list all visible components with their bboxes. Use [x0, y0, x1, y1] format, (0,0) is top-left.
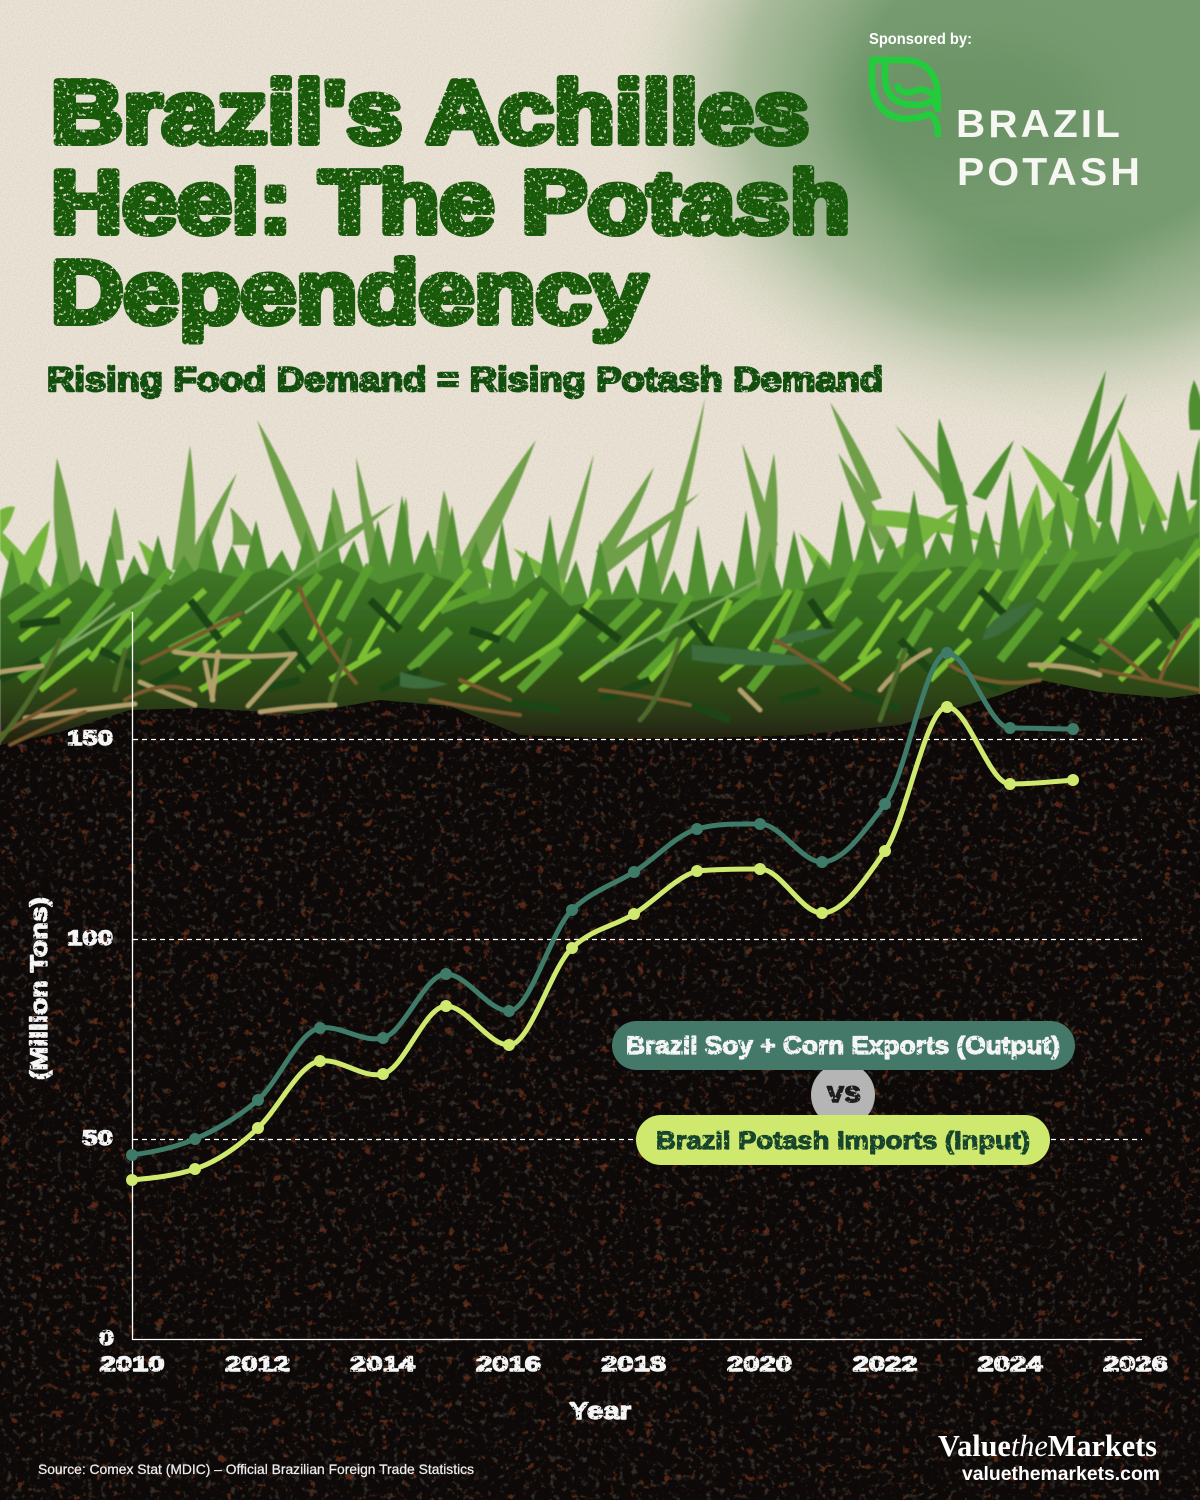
- title: [51, 62, 850, 342]
- y axis tick labels: 150: [67, 727, 113, 750]
- logo wordmark: POTASH: [957, 151, 1143, 194]
- ValueTheMarkets logo: valuethemarkets.com: [962, 1464, 1160, 1485]
- sponsor logo: [870, 59, 1143, 194]
- title: Dependency: [51, 242, 647, 342]
- ValueTheMarkets logo: [938, 1428, 1160, 1485]
- grass: straw and dry stems: [0, 587, 1200, 745]
- grass: dark base mass: [0, 532, 1200, 780]
- source note: Source: Comex Stat (MDIC) – Official Brazilian Foreign Trade Statistics: [38, 1461, 474, 1477]
- legend: potash imports: [636, 1115, 1050, 1165]
- x axis tick labels: 2020: [727, 1353, 792, 1376]
- line: potash imports: [126, 701, 1079, 1186]
- legend: soy and corn exports: Brazil Soy + Corn Exports (Output): [626, 1032, 1060, 1060]
- subtitle: Rising Food Demand = Rising Potash Demand: [47, 361, 883, 399]
- sponsor label: Sponsored by:: [869, 31, 972, 48]
- y axis tick labels: 50: [82, 1127, 113, 1150]
- logo wordmark: [956, 103, 1143, 194]
- x axis tick labels: 2016: [476, 1353, 541, 1376]
- title: Heel: The Potash: [51, 152, 850, 252]
- soil: [0, 670, 1200, 1500]
- legend: potash imports: Brazil Potash Imports (Input): [656, 1127, 1030, 1155]
- legend: soy and corn exports: [612, 1021, 1075, 1070]
- x axis tick labels: [100, 1353, 1168, 1376]
- x axis tick labels: 2022: [852, 1353, 918, 1376]
- grass: jagged leaf edge: [0, 470, 1200, 700]
- x axis tick labels: 2010: [100, 1353, 164, 1376]
- x axis tick labels: 2018: [601, 1353, 666, 1376]
- grass: broad dark leaves: [400, 600, 1037, 689]
- logo wordmark: BRAZIL: [956, 103, 1123, 146]
- x axis tick labels: 2012: [225, 1353, 290, 1376]
- chart axes and grid lines: [132, 612, 1142, 1340]
- x axis tick labels: 2014: [350, 1353, 415, 1376]
- x axis title: Year: [569, 1398, 631, 1425]
- green sponsor glow: [600, 0, 1200, 450]
- y axis tick labels: 0: [99, 1327, 114, 1350]
- y axis tick labels: 100: [67, 927, 113, 950]
- x axis tick labels: 2024: [978, 1353, 1043, 1376]
- y axis tick labels: [67, 727, 114, 1350]
- y axis title: (Million Tons): [26, 897, 53, 1080]
- vs badge: [811, 1063, 875, 1127]
- grass: [0, 370, 1200, 780]
- icon: leaf: [870, 59, 938, 137]
- line: soy and corn exports: [126, 647, 1079, 1161]
- ValueTheMarkets logo: ValuetheMarkets: [938, 1428, 1157, 1463]
- vs badge: vs: [827, 1076, 861, 1109]
- grass: tall back blades: [54, 398, 956, 725]
- grass: leaf strokes: [0, 533, 1200, 720]
- x axis tick labels: 2026: [1103, 1353, 1168, 1376]
- title: Brazil's Achilles: [51, 62, 809, 162]
